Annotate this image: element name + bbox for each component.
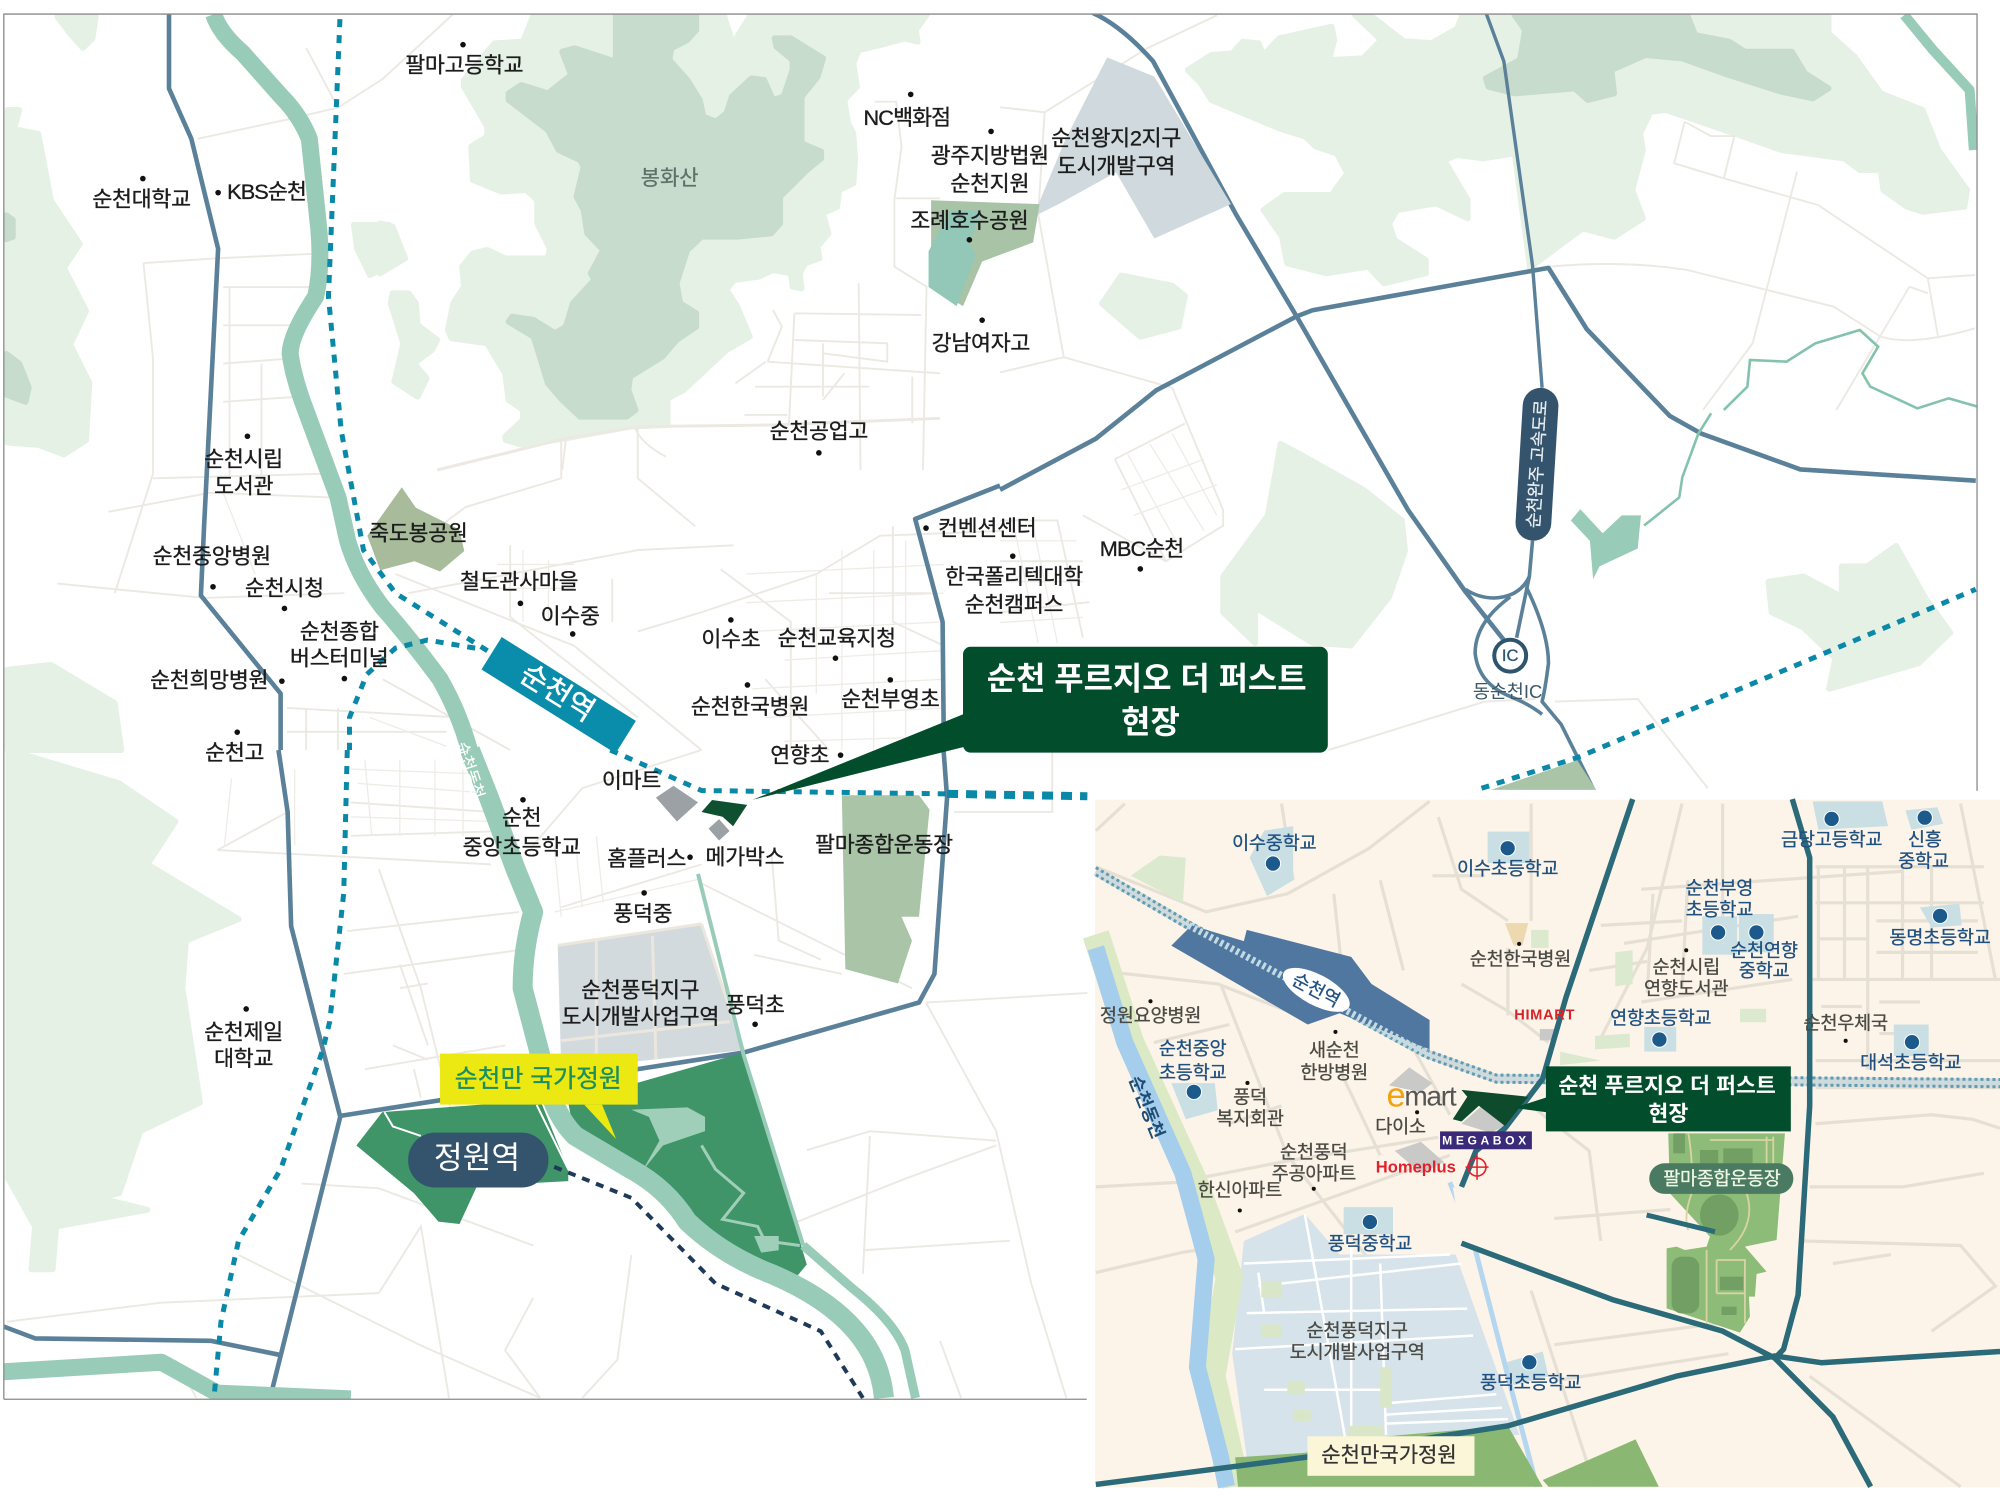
label: Suncheon-dong stream: 순천동천: [452, 740, 487, 801]
main map place labels: 도서관: [214, 473, 273, 498]
main map place labels: 컨벤션센터: [938, 516, 1036, 541]
logo: HIMART: HIMART: [1514, 1007, 1575, 1023]
callout: project site inset: 현장: [1648, 1101, 1688, 1126]
main map place labels: 강남여자고: [932, 331, 1030, 356]
main map place labels: 풍덕초: [726, 993, 785, 1018]
buildings: emart and megabox: [656, 786, 730, 841]
main map place labels: 광주지방법원: [931, 143, 1049, 168]
forests, south-west part: [8, 750, 239, 1269]
minor roads, north-centre: [437, 102, 940, 470]
inset place labels: [1100, 949, 1888, 1363]
main map place labels: 이수초: [701, 627, 760, 652]
label: sports complex pill: 팔마종합운동장: [1663, 1168, 1781, 1189]
area: Pungdeok district: [4, 750, 930, 1399]
minor roads, south: [7, 750, 1087, 1398]
inset school labels: 초등학교: [1159, 1062, 1226, 1083]
main map place labels: NC백화점: [864, 105, 950, 130]
arterial roads: [1461, 799, 1633, 1187]
main map place labels: 순천공업고: [770, 419, 868, 444]
label: Suncheon station banner: 순천역: [514, 657, 600, 728]
label: national garden: 순천만국가정원: [1321, 1443, 1457, 1467]
icon: IC marker: [1494, 640, 1526, 672]
icon: IC marker: IC: [1502, 646, 1519, 665]
main map place labels: 순천종합: [300, 619, 379, 644]
callout: project site inset: 순천 푸르지오 더 퍼스트: [1558, 1073, 1776, 1098]
main map place labels: 이수중: [541, 604, 600, 629]
sports complex inset: [1647, 1133, 1785, 1333]
main map place labels: 팔마고등학교: [405, 53, 523, 78]
minor roads, north-west: [57, 14, 1001, 750]
inset station label: [1276, 959, 1356, 1021]
inset place labels: 한방병원: [1300, 1062, 1368, 1083]
logo: Homeplus: Homeplus: [1376, 1158, 1456, 1177]
label: Suncheon station banner: [481, 637, 636, 753]
callout: project site main: 현장: [1121, 704, 1180, 740]
stream with banks: [1096, 934, 1235, 1487]
main map place labels: 풍덕중: [613, 901, 672, 926]
main map place labels: 순천지원: [950, 171, 1029, 196]
rail corridor: [1096, 868, 2000, 1087]
road: west ring road: [169, 14, 1000, 750]
main map place labels: 메가박스: [706, 845, 784, 870]
inset school labels: 풍덕중학교: [1328, 1233, 1412, 1254]
main map place labels: 이마트: [602, 768, 661, 793]
callout: project site main: [753, 647, 1328, 800]
inset school icons: [1186, 810, 1948, 1370]
district: [1232, 1214, 1520, 1462]
main map place labels: 홈플러스: [607, 846, 686, 871]
main map place labels: KBS순천: [227, 179, 306, 204]
main map place labels: 대학교: [214, 1046, 273, 1071]
inset place labels: 순천우체국: [1803, 1012, 1888, 1033]
logo: emart: emart: [1386, 1077, 1457, 1115]
inset school labels: 순천연향: [1730, 940, 1798, 961]
label: Dongsuncheon IC: 동순천IC: [1473, 681, 1542, 702]
main map place labels: 중앙초등학교: [463, 834, 581, 859]
inset school labels: 풍덕초등학교: [1480, 1372, 1581, 1393]
main map place labels: 순천중앙병원: [153, 544, 271, 569]
inset place labels: 복지회관: [1216, 1108, 1284, 1129]
inset school labels: 동명초등학교: [1889, 927, 1991, 948]
inset place labels: 순천풍덕지구: [1307, 1320, 1408, 1341]
station complex: [1171, 925, 1430, 1049]
forests, south-east: [1102, 276, 1950, 689]
inset school labels: 이수중학교: [1232, 833, 1317, 854]
inset school labels: 연향초등학교: [1610, 1007, 1711, 1028]
inset school labels: 이수초등학교: [1457, 858, 1558, 879]
main map place labels: 한국폴리텍대학: [945, 564, 1083, 589]
main map place labels: 도시개발사업구역: [562, 1004, 719, 1029]
main map place labels: 순천시청: [245, 576, 324, 601]
inset place labels: 순천풍덕: [1280, 1141, 1348, 1162]
main map place labels: 철도관사마을: [460, 569, 578, 594]
label: national garden: [1307, 1436, 1474, 1476]
inset place labels: 새순천: [1309, 1039, 1359, 1060]
inset school labels: 순천부영: [1686, 877, 1753, 898]
map label: expressway pill: 순천완주 고속도로: [1523, 400, 1551, 529]
main map place labels: MBC순천: [1100, 536, 1183, 561]
main map place labels: 연향초: [770, 743, 829, 768]
inset school labels: 중학교: [1898, 850, 1949, 871]
map label: expressway pill: [1514, 387, 1559, 542]
inset school labels: 초등학교: [1686, 899, 1753, 920]
inset school labels: [1159, 829, 1991, 1393]
inset school labels: 중학교: [1739, 960, 1789, 981]
inset place labels: 순천한국병원: [1470, 949, 1571, 970]
inset place labels: 순천시립: [1652, 956, 1720, 977]
inset minor roads: [1096, 801, 2000, 1487]
main map place labels: 순천풍덕지구: [581, 977, 699, 1002]
inset school labels: 순천중앙: [1159, 1038, 1226, 1059]
main map place labels: 죽도봉공원: [369, 521, 468, 546]
main map place labels: 순천: [502, 805, 541, 830]
blurred patch: [1453, 1187, 1543, 1282]
callout: project site inset: [1546, 1066, 1791, 1131]
inset school labels: 신흥: [1908, 829, 1942, 850]
main map place labels: 순천제일: [204, 1019, 283, 1044]
label: Jeongwon station: [408, 1133, 548, 1188]
site footprint inset: [1453, 1090, 1528, 1126]
retail footprints: [1389, 1029, 1554, 1173]
inset place labels: 주공아파트: [1272, 1163, 1356, 1184]
main map place labels: 순천캠퍼스: [965, 592, 1063, 617]
main map place labels: 순천고: [205, 740, 264, 765]
inset place labels: 다이소: [1375, 1116, 1426, 1137]
main map place labels: 팔마종합운동장: [815, 832, 953, 857]
main map place labels: 순천대학교: [92, 187, 191, 212]
minor roads, east: [1000, 15, 1708, 788]
main map place labels: 순천시립: [204, 447, 283, 472]
main map place labels: 순천희망병원: [150, 667, 268, 692]
inset place labels: 정원요양병원: [1100, 1005, 1201, 1026]
park: Jukdobong park: [367, 487, 464, 571]
main map place labels: 순천한국병원: [691, 694, 809, 719]
inset place labels: 연향도서관: [1644, 978, 1729, 999]
stream and river, north-east corner: [1724, 15, 1977, 410]
area: Wangji 2 district: [1033, 57, 1231, 239]
main map place labels: 순천부영초: [841, 687, 940, 712]
main map place labels: 순천교육지청: [778, 625, 896, 650]
river south section: [470, 750, 884, 1398]
inset stream label: 순천동천: [1125, 1073, 1168, 1141]
inset station label: 순천역: [1289, 969, 1344, 1011]
main map place labels: 버스터미널: [290, 646, 388, 671]
callout: national garden label: [440, 1054, 638, 1139]
label: sports complex pill: [1649, 1163, 1793, 1194]
road: south ring road: [4, 750, 947, 1398]
main map place labels: 조례호수공원: [910, 208, 1028, 233]
mountain: Bonghwasan: [380, 14, 927, 445]
inset place labels: 도시개발사업구역: [1290, 1342, 1425, 1363]
main map place labels: 순천왕지2지구: [1051, 125, 1181, 150]
main map place labels: 도시개발구역: [1057, 153, 1175, 178]
callout: project site main: 순천 푸르지오 더 퍼스트: [987, 661, 1307, 697]
main map place labels: [92, 42, 1183, 1071]
inset place labels: 한신아파트: [1198, 1180, 1282, 1201]
mask right of frame: [1088, 792, 2000, 1497]
label: Bonghwasan: 봉화산: [641, 166, 699, 190]
site footprint: [702, 800, 747, 826]
inset school labels: 금당고등학교: [1781, 829, 1882, 850]
inset place labels: 풍덕: [1233, 1086, 1267, 1107]
forests, west edge: [6, 17, 405, 750]
roads: east expressway and interchange: [1000, 13, 1976, 788]
national garden park: [356, 1053, 807, 1281]
lake and lower stream, east: [1491, 413, 1711, 790]
inset place dots: [1148, 942, 1848, 1213]
callout: national garden label: 순천만 국가정원: [455, 1065, 622, 1093]
panel: detail inset map: [1095, 799, 2000, 1487]
school zones: [1171, 801, 1962, 1385]
logo: Homeplus: [1376, 1154, 1489, 1180]
label: Jeongwon station: 정원역: [434, 1141, 520, 1176]
river: Suncheon-dong stream: [214, 14, 469, 750]
park: Jorye lake park: [929, 200, 1040, 306]
logo: Megabox: MEGABOX: [1442, 1133, 1530, 1147]
inset school labels: 대석초등학교: [1860, 1052, 1961, 1073]
south garden: [1235, 1426, 1543, 1487]
sports complex: [842, 795, 930, 983]
inset small parks: [1131, 855, 1766, 1065]
forests and mountains, north-east: [1188, 14, 1975, 410]
